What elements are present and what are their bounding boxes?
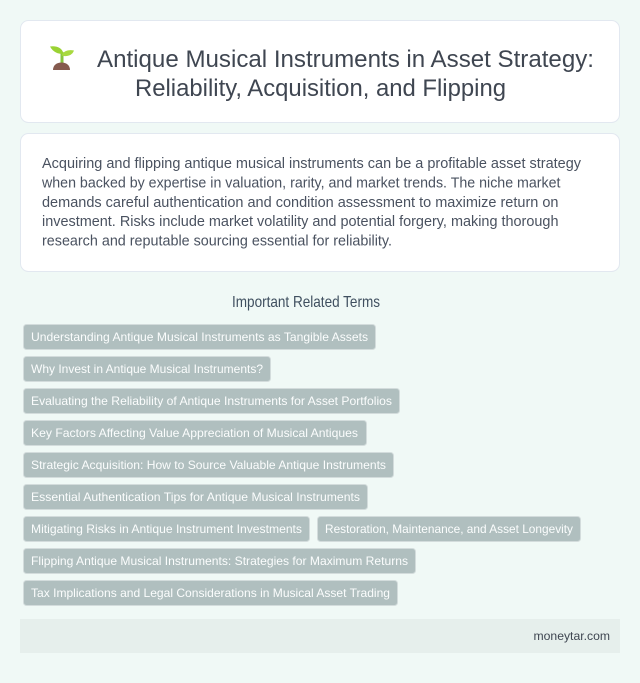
- panel: related term chips: [24, 324, 580, 606]
- summary text: [41, 156, 582, 250]
- chip 1: Understanding Antique Musical Instruments as Tangible Assets: [31, 330, 368, 344]
- chip 9: [24, 548, 416, 574]
- heading: related terms: Important Related Terms: [232, 294, 380, 311]
- chip 5: Strategic Acquisition: How to Source Valuable Antique Instruments: [31, 458, 386, 472]
- panel: title card: [20, 20, 620, 122]
- summary text: investment. Risks include market volatility and potential forgery, making thorough: [42, 214, 558, 230]
- chip 7: Mitigating Risks in Antique Instrument Investments: [31, 522, 302, 536]
- chip 10: Tax Implications and Legal Considerations in Musical Asset Trading: [31, 586, 390, 600]
- chip 3: [24, 388, 400, 414]
- title: Reliability, Acquisition, and Flipping: [135, 75, 506, 102]
- title: Antique Musical Instruments in Asset Strategy:: [97, 46, 594, 73]
- chip 7: [24, 516, 310, 542]
- chip 8: [318, 516, 580, 542]
- chip 3: Evaluating the Reliability of Antique Instruments for Asset Portfolios: [31, 394, 392, 408]
- chip 10: [24, 580, 398, 606]
- chip 9: Flipping Antique Musical Instruments: Strategies for Maximum Returns: [31, 554, 408, 568]
- panel: summary card: [20, 134, 620, 272]
- chip 8: Restoration, Maintenance, and Asset Longevity: [325, 522, 573, 536]
- summary text: Acquiring and flipping antique musical instruments can be a profitable asset strategy: [42, 156, 582, 172]
- summary text: research and reputable sourcing essential for reliability.: [42, 234, 392, 250]
- chip 1: [24, 324, 376, 350]
- title: [97, 46, 594, 102]
- summary text: demands careful authentication and condition assessment to maximize return on: [42, 195, 558, 211]
- summary text: when backed by expertise in valuation, rarity, and market trends. The niche market: [41, 176, 560, 192]
- chip 2: Why Invest in Antique Musical Instruments?: [31, 362, 263, 376]
- chip 2: [24, 356, 270, 382]
- icon: sprout: [50, 46, 74, 70]
- chip 5: [24, 452, 394, 478]
- chip 4: Key Factors Affecting Value Appreciation of Musical Antiques: [31, 426, 358, 440]
- chip 6: Essential Authentication Tips for Antique Musical Instruments: [31, 490, 360, 504]
- chip 4: [24, 420, 366, 446]
- footer: moneytar.com: [534, 629, 610, 643]
- footer: [20, 619, 620, 653]
- chip 6: [24, 484, 368, 510]
